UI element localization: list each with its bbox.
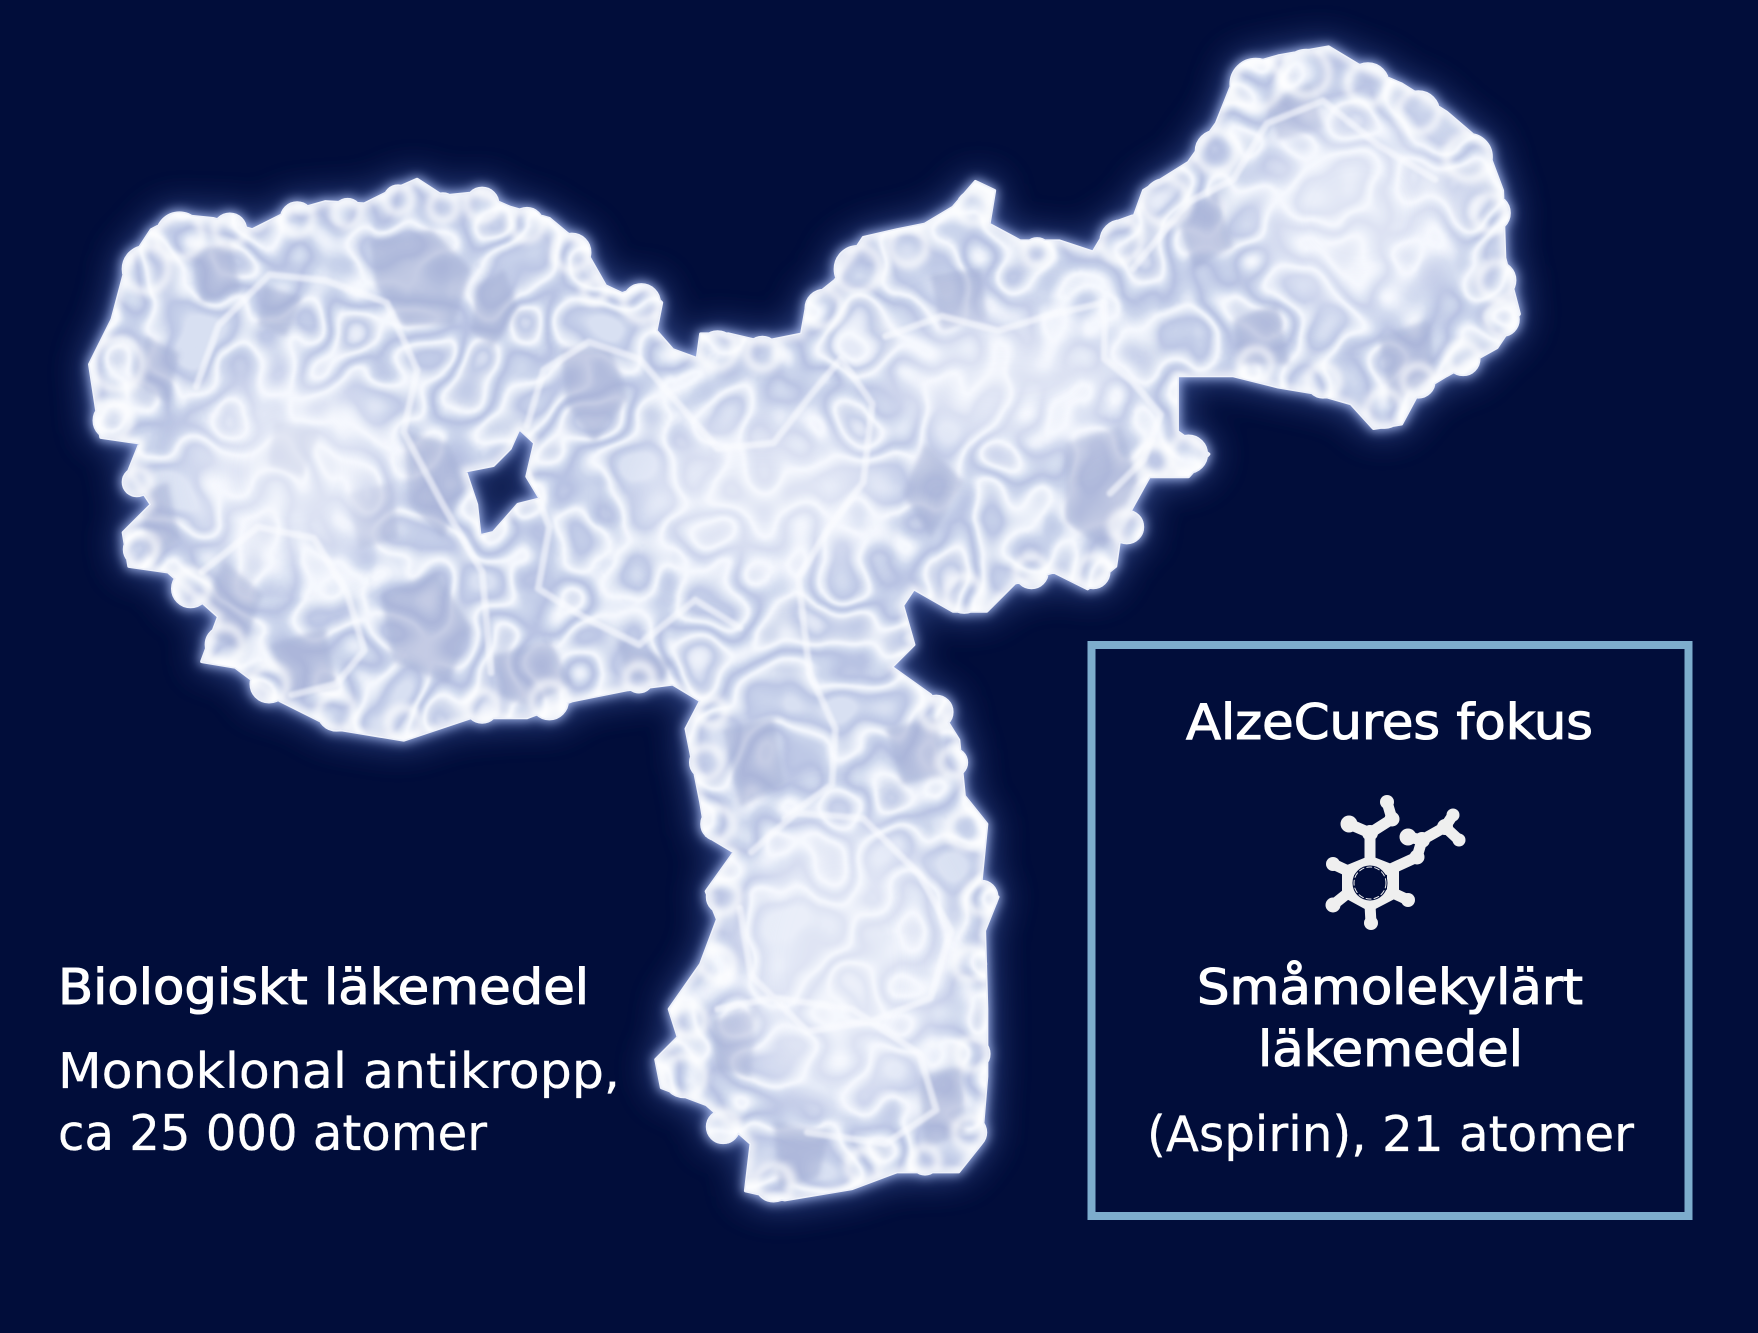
text: aspirin atom count: (Aspirin), 21 atomer bbox=[1147, 1106, 1635, 1163]
bright central areas bbox=[191, 118, 1458, 1110]
icon: aspirin molecule bbox=[1326, 795, 1466, 930]
darker cells bbox=[132, 84, 1435, 1188]
ridge lines bbox=[196, 101, 1435, 1144]
label: small-molecule drug: läkemedel bbox=[1258, 1021, 1523, 1078]
text block: biologic drug: ca 25 000 atomer bbox=[58, 1105, 488, 1162]
panel: AlzeCure focus bbox=[1092, 645, 1688, 1216]
label: small-molecule drug: Småmolekylärt bbox=[1197, 959, 1583, 1016]
heading: AlzeCures fokus: AlzeCures fokus bbox=[1186, 694, 1593, 751]
text block: biologic drug bbox=[58, 959, 620, 1162]
illustration: monoclonal antibody molecule bbox=[90, 47, 1519, 1201]
text block: biologic drug: Biologiskt läkemedel bbox=[58, 959, 589, 1016]
text block: biologic drug: Monoklonal antikropp, bbox=[58, 1043, 620, 1100]
label: small-molecule drug bbox=[1197, 959, 1583, 1078]
